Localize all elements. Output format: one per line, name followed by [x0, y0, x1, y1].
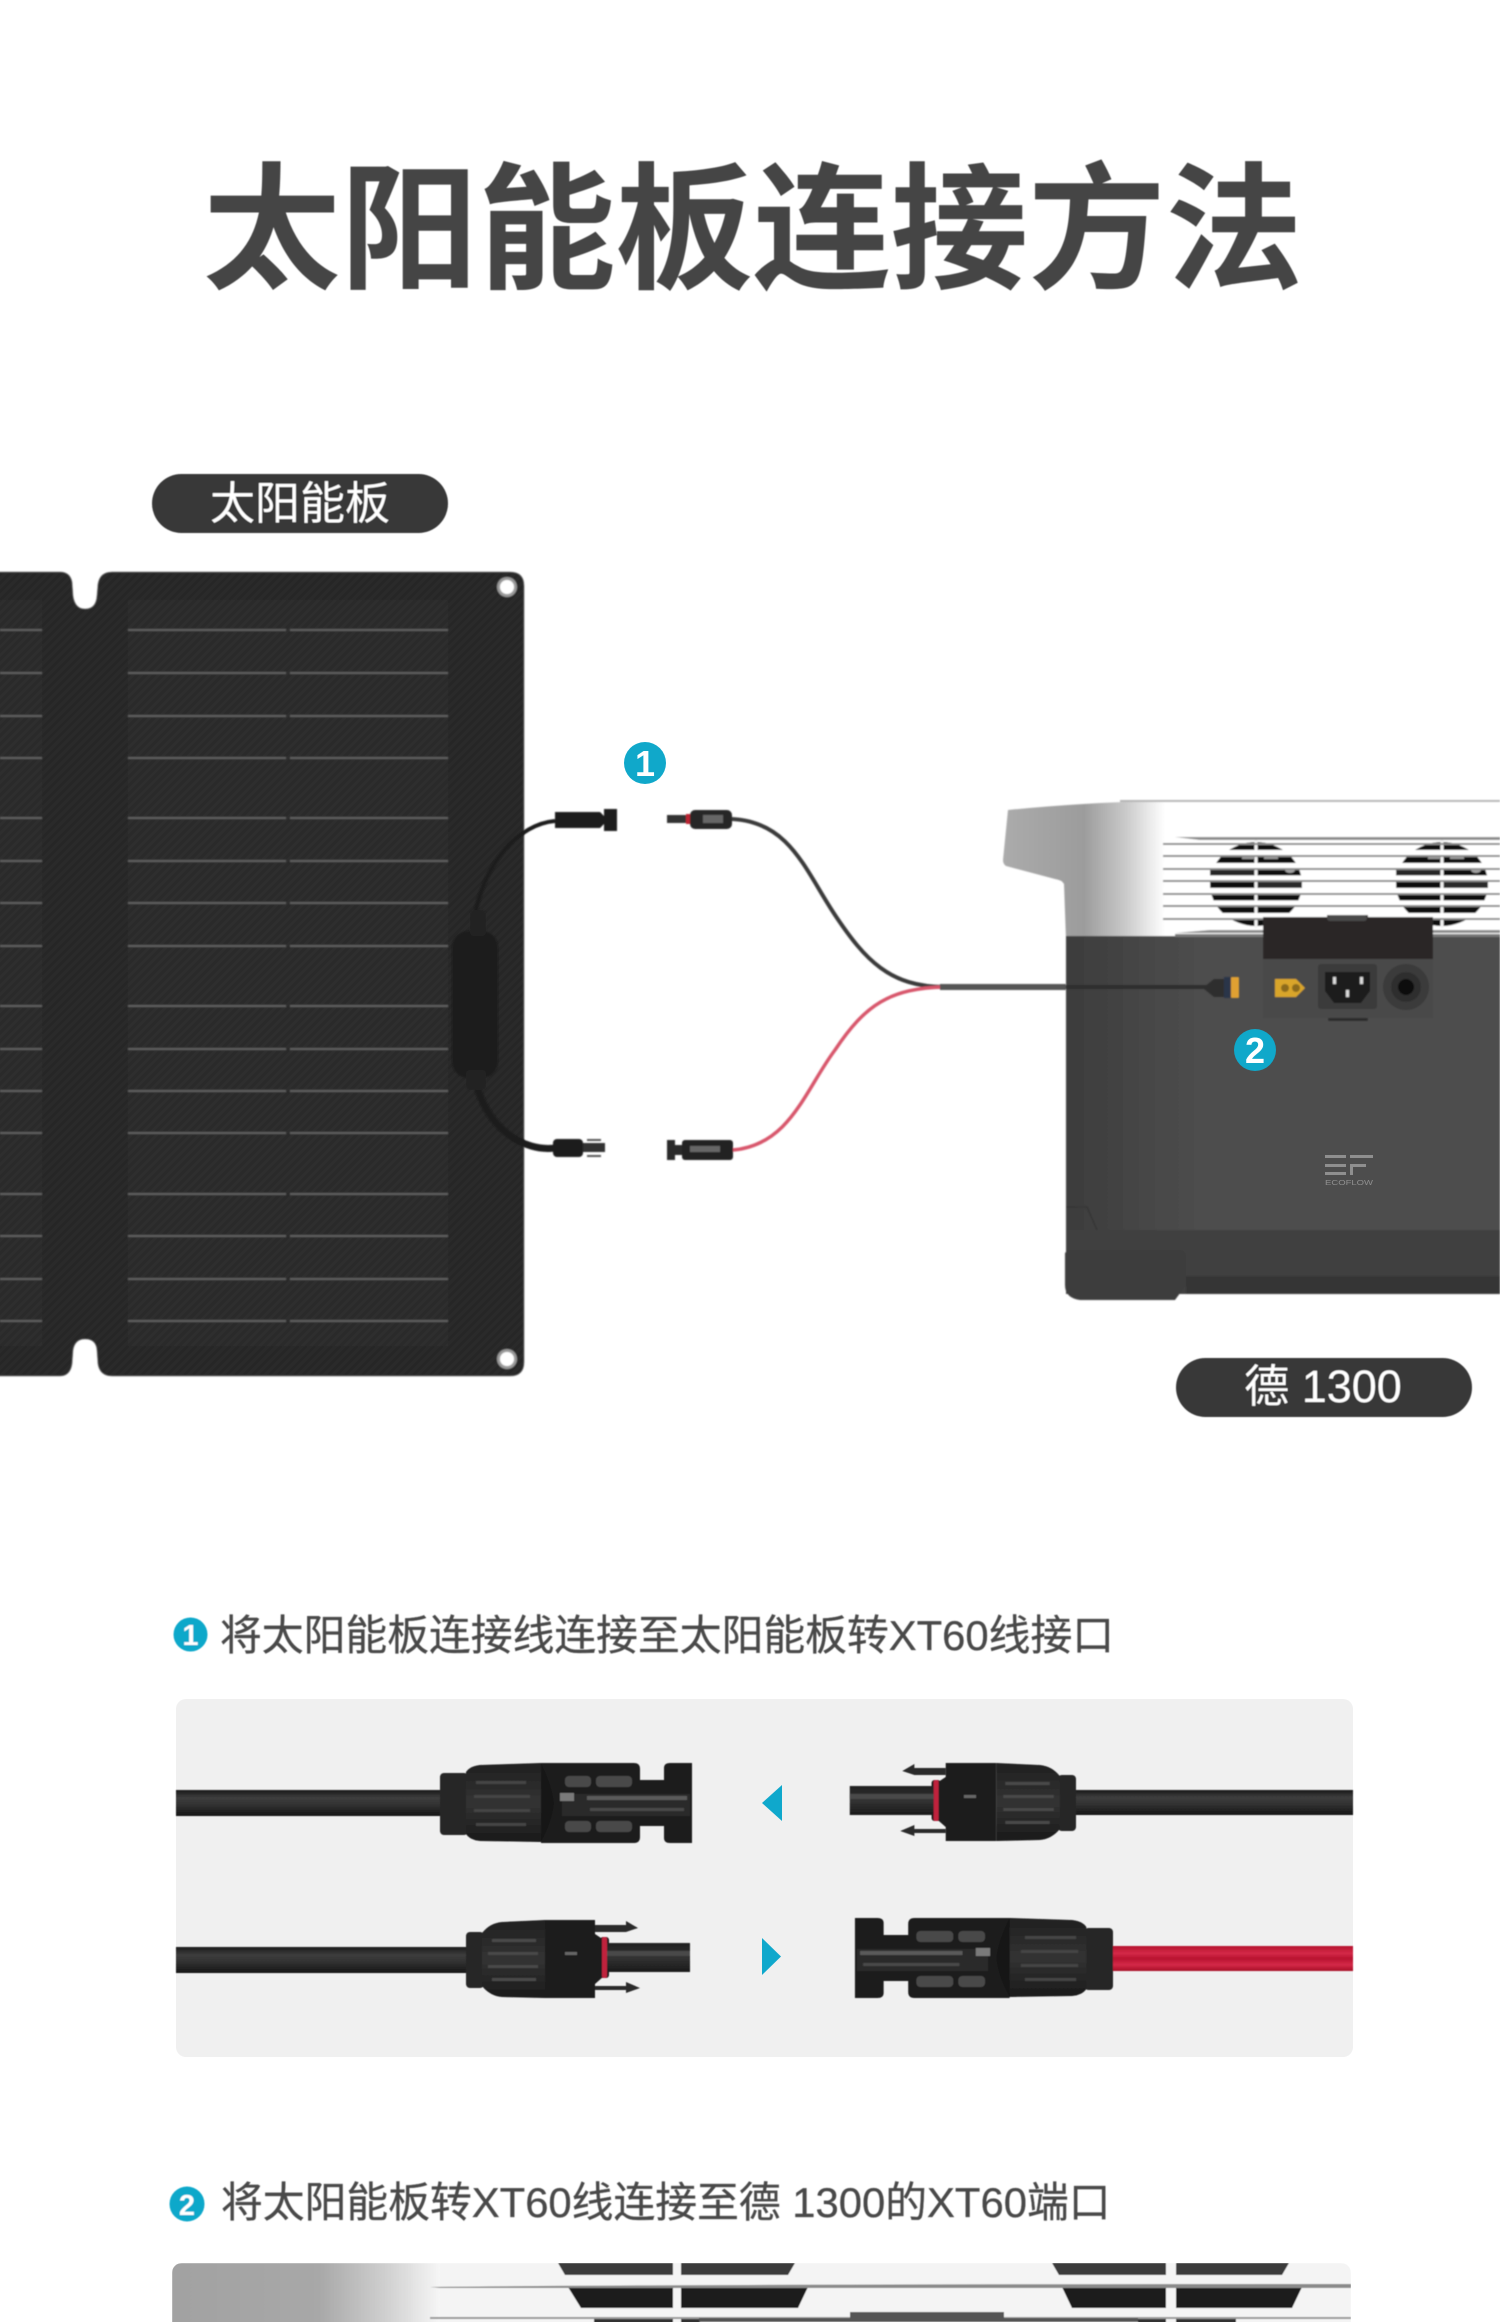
- port panel: [1263, 959, 1433, 1018]
- solar panel: [0, 572, 524, 1376]
- power station: [1003, 800, 1500, 1300]
- connector: black male left: [176, 1920, 690, 1998]
- panel: connector details: [176, 1699, 1353, 2057]
- title: 太阳能板连接方法: [203, 155, 1303, 308]
- connector: red female: [855, 1918, 1353, 1998]
- ecoflow logo: ECOFLOW: [1325, 1180, 1374, 1187]
- badge 1: 1: [635, 743, 655, 784]
- label pill: Delta 1300: 德 1300: [1244, 1361, 1402, 1412]
- split cable with connectors and XT60 plug: [667, 810, 1239, 1160]
- arrow left: [762, 1785, 782, 1821]
- label pill: solar panel: [152, 474, 448, 533]
- panel cables and connectors: [452, 809, 617, 1157]
- step 1 heading: 1: [182, 1620, 199, 1652]
- step 2 heading: 将太阳能板转XT60线连接至德 1300的XT60端口: [221, 2179, 1111, 2226]
- step 1 heading: 将太阳能板连接线连接至太阳能板转XT60线接口: [220, 1612, 1114, 1659]
- label pill: Delta 1300: [1176, 1358, 1472, 1417]
- label pill: solar panel: 太阳能板: [210, 478, 390, 529]
- connector: black male right: [850, 1763, 1353, 1841]
- ecoflow logo: [1325, 1155, 1374, 1187]
- arrow right: [762, 1938, 781, 1975]
- fans: [1163, 837, 1500, 933]
- photo: XT60 port close-up: [172, 2263, 1351, 2322]
- badge 2: [1234, 1029, 1276, 1071]
- connector: black female: [176, 1763, 692, 1843]
- step 2 heading: 2: [179, 2190, 195, 2222]
- badge 2: 2: [1245, 1030, 1265, 1071]
- badge 1: [624, 742, 666, 784]
